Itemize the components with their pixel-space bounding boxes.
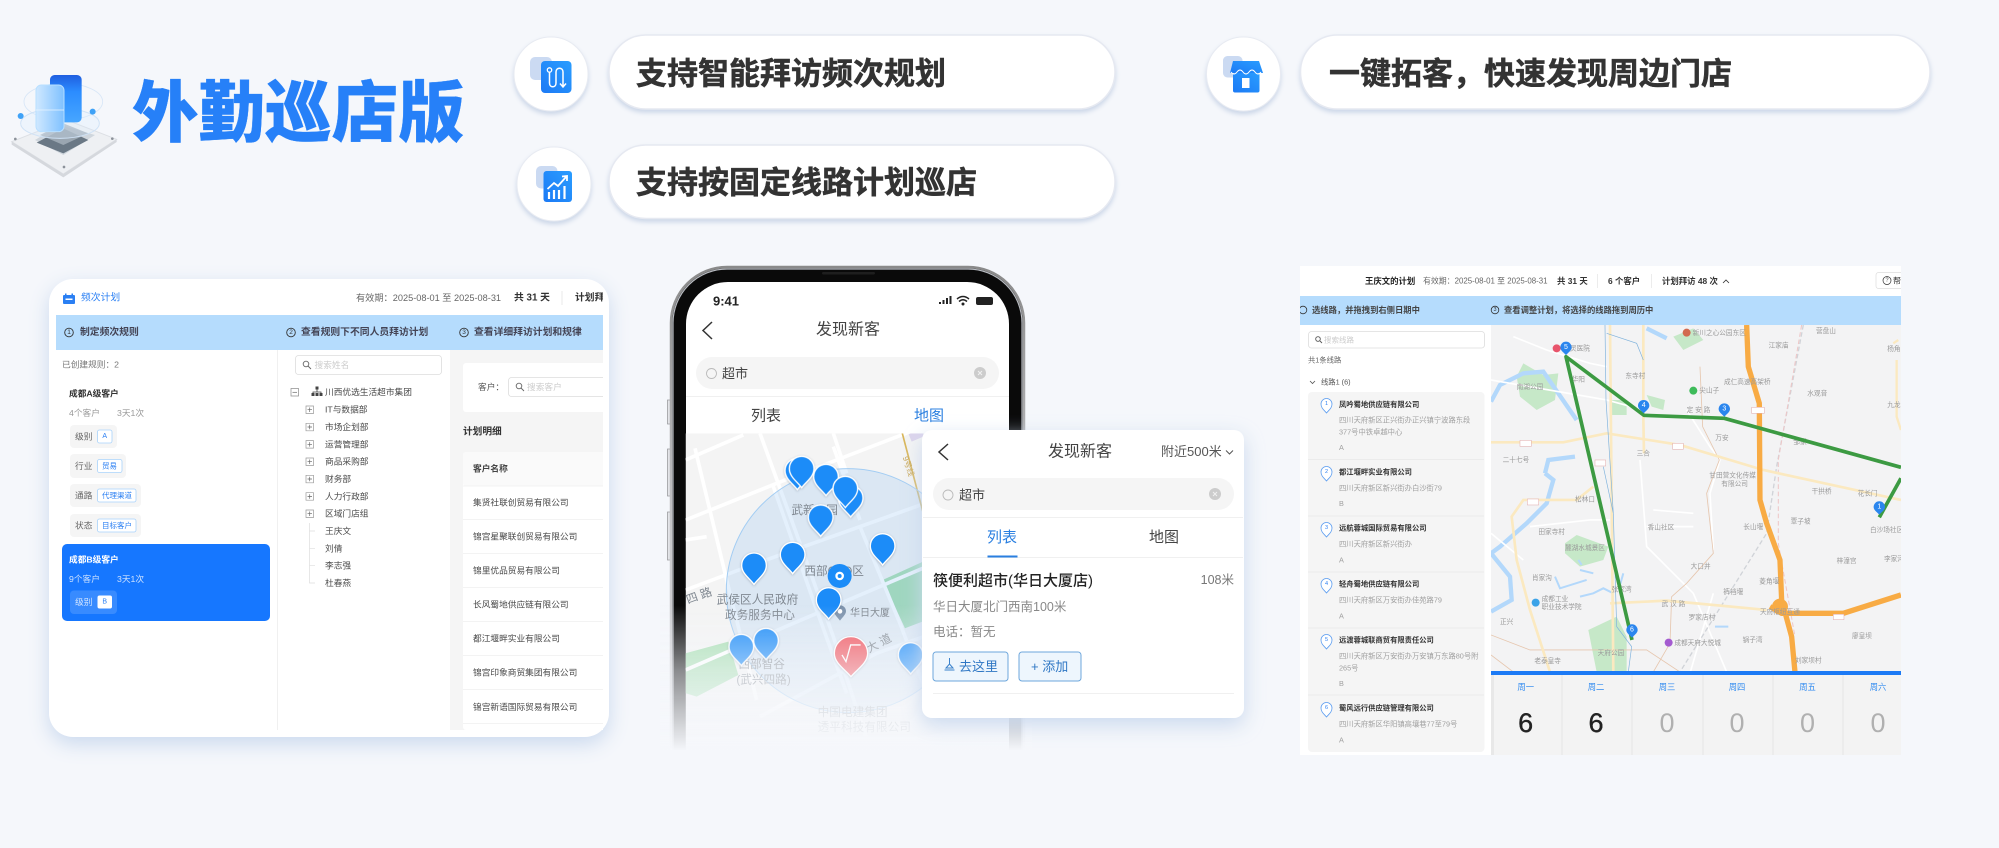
rule card A: 成都A级客户 — [69, 388, 119, 398]
organisation tree: 李志强 — [325, 560, 351, 571]
map labels: 南湖公园 — [1517, 382, 1544, 391]
map labels: 天府公园 — [1598, 648, 1625, 657]
card search bar: 超市 — [959, 488, 985, 502]
route stop 6: A — [1339, 736, 1344, 744]
road shields — [1520, 407, 1844, 620]
search names — [296, 356, 442, 374]
route stop 5: 远渡蓉城联商贸有限责任公司 — [1339, 636, 1434, 644]
rule card A — [69, 388, 144, 537]
plan header: 有效期：2025-08-01 至 2025-08-31 — [1423, 276, 1548, 286]
map labels: 三合 — [1637, 448, 1650, 457]
weekday labels: 周六 — [1870, 682, 1886, 692]
route stop 3: A — [1339, 556, 1344, 564]
map green areas — [686, 560, 927, 697]
numbered route pins: 6 — [1630, 626, 1634, 633]
button: add — [1019, 652, 1081, 681]
route list column: 搜索线路 — [1324, 334, 1354, 344]
map labels: 甘田营文化传媒 — [1709, 470, 1756, 479]
customer table: 锦里优品贸易有限公司 — [473, 564, 560, 576]
plan header — [1365, 272, 1909, 288]
step band: 3 — [1493, 307, 1497, 313]
route stop 4 — [1321, 578, 1442, 620]
daily visit counts: 0 — [1800, 708, 1815, 738]
map labels: 松林口 — [1575, 494, 1595, 503]
planned visits truncated: 计划拜访 — [575, 290, 614, 304]
route stop 1: 凤吟蜀地供应链有限公司 — [1339, 400, 1419, 409]
numbered route pins: 5 — [1564, 344, 1568, 351]
rule card A: 级别 — [75, 430, 92, 442]
customer table: 长风蜀地供应链有限公司 — [473, 598, 569, 610]
map labels — [684, 455, 917, 734]
customer table: 锦宫星聚联创贸易有限公司 — [473, 530, 577, 542]
heading: frequency plan: 频次计划 — [81, 290, 120, 304]
store address: 华日大厦北门西南100米 — [933, 599, 1067, 614]
map labels: 覃子坡 — [1791, 516, 1811, 525]
rule card A: 4个客户 — [69, 407, 100, 418]
screen title: 发现新客 — [816, 320, 880, 338]
feature: smart visit frequency planning — [514, 35, 1115, 111]
pill: text 1: 支持智能拜访频次规划 — [636, 56, 946, 92]
rule card B selected: 级别 — [75, 596, 92, 607]
button: go here: 去这里 — [959, 659, 998, 674]
map labels: 成都工业 — [1542, 594, 1569, 603]
status bar — [713, 294, 993, 308]
route stop 3: 远航蓉城国际贸易有限公司 — [1339, 524, 1427, 532]
map labels: 白沙场社区 — [1870, 525, 1904, 534]
organisation tree: 川西优选生活超市集团 — [325, 386, 412, 397]
organisation tree: 区域门店组 — [325, 508, 369, 519]
icon: route in circle — [514, 37, 588, 111]
phone bottom fade — [660, 605, 1032, 751]
route stop 6 — [1321, 703, 1457, 744]
rule card B selected: 成都B级客户 — [69, 554, 119, 564]
map labels: 9号线 — [901, 455, 917, 477]
step band — [1299, 296, 1901, 325]
map labels: 菱角堰 — [1759, 576, 1780, 585]
store phone: 电话：暂无 — [933, 625, 996, 639]
phone body — [671, 267, 1024, 827]
rule card A: A — [102, 433, 107, 440]
organisation tree: 市场企划部 — [325, 421, 369, 432]
step band: 查看调整计划，将选择的线路拖到周历中 — [1504, 305, 1653, 315]
map labels — [1500, 326, 1904, 665]
route list column: 线路1 (6) — [1321, 378, 1351, 386]
rivers — [1491, 328, 1667, 612]
route stop 6: 四川天府新区华阳镇高壤巷77至79号 — [1339, 720, 1457, 728]
button: go here — [933, 652, 1008, 681]
route list column — [1308, 332, 1484, 752]
back chevron — [703, 322, 712, 339]
customer filter card — [463, 363, 608, 412]
map labels: 成都天府大悦城 — [1674, 638, 1721, 647]
map labels: 麓湖水城景区 — [1565, 543, 1605, 552]
orange expressway — [1747, 325, 1901, 672]
map labels: 四 路 — [684, 584, 714, 607]
weekday labels: 周四 — [1729, 682, 1745, 692]
map labels: 长山堰 — [1743, 522, 1764, 531]
phone mockup — [667, 266, 1026, 746]
map labels: 西部智谷 — [738, 657, 785, 671]
icon: calendar — [63, 294, 75, 304]
map labels: 职业技术学院 — [1542, 602, 1582, 611]
map labels: 大 道 — [864, 631, 894, 656]
map labels: 干拱桥 — [1812, 486, 1832, 495]
rule card B selected: B — [102, 598, 107, 606]
weekday labels: 周五 — [1799, 682, 1816, 692]
map — [686, 433, 924, 738]
map labels: 香山社区 — [1648, 522, 1675, 531]
numbered route pins: 3 — [1722, 405, 1726, 412]
map labels: 灵医院 — [1570, 343, 1590, 352]
map labels: 有限公司 — [1721, 479, 1748, 488]
plan header: 王庆文的计划 — [1365, 276, 1415, 286]
organisation tree: IT与数据部 — [325, 404, 368, 415]
map labels: 定 安 路 — [1687, 405, 1711, 414]
map labels: 廖皇坝 — [1852, 631, 1872, 640]
map labels: 政务服务中心 — [725, 608, 795, 622]
route stop 3 — [1321, 522, 1427, 564]
customer table: 客户名称 — [473, 462, 508, 474]
validity period: 有效期：2025-08-01 至 2025-08-31 — [356, 292, 501, 303]
rule card A: 3天1次 — [117, 407, 144, 418]
poi markers — [1532, 329, 1697, 647]
pill: text 2 — [609, 145, 1115, 218]
customer filter card: 客户： — [478, 381, 504, 392]
step band: 选线路，并拖拽到右侧日期中 — [1312, 305, 1420, 315]
rule card B selected: 9个客户 — [69, 573, 100, 584]
organisation tree: 人力行政部 — [325, 490, 369, 501]
map labels: 水观音 — [1807, 388, 1828, 397]
organisation tree: 刘倩 — [325, 542, 343, 553]
customer table: 锦宫新语国际贸易有限公司 — [473, 701, 577, 712]
weekday labels — [1517, 682, 1886, 692]
map labels: 罗家店村 — [1689, 612, 1716, 621]
route stop 3: 四川天府新区新兴街办 — [1339, 540, 1412, 548]
map labels: 张家湾 — [1612, 584, 1632, 593]
tabs — [751, 408, 944, 424]
icon: chart in circle — [517, 147, 591, 221]
step band: 1 — [67, 329, 71, 336]
card tabs: 列表 — [987, 529, 1017, 546]
search bar: 超市 — [722, 366, 748, 381]
card tabs: 地图 — [1149, 529, 1179, 546]
daily visit counts — [1518, 708, 1886, 738]
rule card A: 代理渠道 — [102, 490, 132, 500]
plan header: 计划拜访 48 次 — [1662, 276, 1718, 286]
parks — [1517, 328, 1703, 672]
customer table: 集贤社联创贸易有限公司 — [473, 496, 569, 508]
side buttons — [668, 400, 672, 560]
map labels: 刘家坝村 — [1795, 655, 1822, 664]
pill: text 1 — [609, 35, 1115, 109]
plan details heading: 计划明细 — [463, 424, 502, 438]
route stop 4: A — [1339, 612, 1344, 620]
weekday labels: 周三 — [1659, 682, 1675, 692]
route stop 1: A — [1339, 443, 1344, 452]
feature: fixed route plan patrol — [517, 145, 1115, 221]
rule card B selected: 3天1次 — [117, 573, 144, 584]
route list column: 共1条线路 — [1308, 356, 1342, 364]
store distance: 108米 — [1201, 573, 1234, 587]
map labels: 东寺村 — [1625, 371, 1646, 380]
map labels: 华日大厦 — [850, 606, 890, 619]
title: 外勤巡店版 — [132, 77, 464, 151]
rule card A: 贸易 — [102, 460, 117, 470]
route stop 5 — [1321, 634, 1479, 688]
total days: 共 31 天 — [514, 290, 550, 304]
organisation tree — [291, 386, 412, 588]
store name: 筷便利超市(华日大厦店) — [933, 572, 1093, 590]
yellow arterial roads — [1491, 325, 1901, 672]
grey roads — [1491, 337, 1727, 673]
green route line — [1566, 357, 1901, 640]
map labels: 梓潼宫 — [1837, 556, 1857, 565]
panel header — [63, 292, 603, 304]
route stop 4: 轻舟蜀地供应链有限公司 — [1339, 580, 1419, 588]
daily visit counts: 6 — [1588, 708, 1604, 738]
customer table: 都江堰畔实业有限公司 — [473, 632, 560, 644]
detail column — [450, 350, 608, 730]
map labels: 透平科技有限公司 — [818, 720, 911, 734]
map labels: 九龙 — [1887, 400, 1901, 409]
route stop 4: 四川天府新区万安街办佳苑路79 — [1339, 596, 1442, 604]
current location dot — [828, 564, 852, 588]
card title: 发现新客 — [1048, 442, 1112, 460]
numbered route pins: 1 — [1877, 503, 1881, 510]
customer table: 锦宫印象商贸集团有限公司 — [473, 666, 577, 678]
rule count: 已创建规则：2 — [62, 358, 119, 370]
search bar — [696, 357, 999, 389]
phone screen — [686, 282, 1009, 746]
panel: frequency plan screenshot — [49, 279, 614, 737]
customer filter card: 搜索客户 — [527, 381, 562, 392]
map labels: 中国电建集团 — [818, 705, 888, 719]
route stop 1 — [1321, 398, 1470, 452]
step band: 查看详细拜访计划和规律 — [474, 325, 582, 338]
map labels: 邹家 — [1793, 437, 1807, 446]
route stop 4: 4 — [1325, 581, 1328, 587]
card tabs — [923, 529, 1243, 558]
map labels: 天府枢纽互通 — [1760, 607, 1800, 616]
panel: route planning screenshot — [1299, 266, 1909, 755]
plan header: 6 个客户 — [1608, 276, 1640, 286]
route stop 2: 2 — [1325, 469, 1328, 475]
organisation tree: 财务部 — [325, 473, 351, 484]
customer table — [463, 452, 608, 730]
help button — [1876, 272, 1901, 289]
map labels: 万安 — [1715, 433, 1729, 442]
map labels: 杨角 — [1887, 344, 1901, 353]
map roads — [686, 434, 922, 672]
route stop 6: 6 — [1325, 705, 1328, 711]
step band: 2 — [289, 329, 293, 336]
search names: 搜索姓名 — [314, 359, 349, 370]
map labels: 老泰皇寺 — [1534, 656, 1561, 665]
route stop 2: 四川天府新区新兴街办白沙街79 — [1339, 484, 1442, 492]
feature: one-click customer discovery — [1206, 35, 1930, 111]
building marker — [834, 605, 846, 621]
map pins — [729, 456, 923, 674]
route stop 5: 5 — [1325, 637, 1328, 643]
map labels: 江家庙 — [1769, 340, 1789, 349]
rule card A: 通路 — [75, 490, 93, 500]
route map — [1491, 325, 1904, 673]
map labels: 锅子湾 — [1743, 635, 1763, 644]
route stop 5: B — [1339, 679, 1344, 688]
map labels: 新川之心公园东区 — [1693, 328, 1746, 337]
rule card A: 目标客户 — [102, 520, 132, 530]
map labels: 西部CBD区 — [804, 564, 864, 578]
step band: 制定频次规则 — [80, 325, 139, 338]
pill: text 2: 支持按固定线路计划巡店 — [636, 166, 977, 200]
map labels: 肖家沟 — [1532, 573, 1552, 582]
map labels: 武 汉 路 — [1662, 599, 1686, 608]
organisation tree: 王庆文 — [325, 525, 351, 536]
route stop 1: 1 — [1325, 401, 1328, 407]
route stop 1: 377号中铁卓越中心 — [1339, 428, 1403, 436]
route stop 5: 265号 — [1339, 664, 1358, 672]
route stop 5: 四川天府新区万安街办万安镇万东路80号附 — [1339, 652, 1479, 660]
pill: text 3 — [1300, 35, 1930, 109]
daily visit counts: 0 — [1729, 708, 1745, 738]
organisation tree: 商品采购部 — [325, 456, 369, 467]
route stop 1: 四川天府新区正兴街办正兴镇宁波路东段 — [1339, 416, 1470, 424]
button: add: + 添加 — [1031, 659, 1068, 674]
numbered route pins: 4 — [1642, 402, 1646, 409]
step band: 查看规则下不同人员拜访计划 — [301, 325, 429, 338]
organisation tree: 杜春燕 — [325, 577, 351, 588]
route stop 2 — [1321, 466, 1442, 508]
step band: 3 — [462, 329, 466, 336]
icon: isometric logo — [12, 75, 117, 177]
map labels: 李家河 — [1884, 554, 1904, 563]
map labels: 裤裆堰 — [1723, 587, 1744, 596]
icon: store in circle — [1206, 37, 1280, 111]
tabs: 列表 — [751, 408, 781, 424]
card back chevron — [939, 444, 948, 460]
map labels: 正兴 — [1500, 617, 1514, 626]
rule card A: 行业 — [75, 460, 93, 471]
daily visit counts: 0 — [1870, 708, 1886, 738]
map search radius — [726, 468, 922, 713]
daily visit counts: 6 — [1518, 708, 1533, 738]
floating list card — [922, 430, 1244, 718]
weekly calendar — [1491, 671, 1901, 755]
nearby 500 metres filter: 附近500米 — [1161, 444, 1222, 459]
route stop 3: 3 — [1325, 525, 1328, 531]
map labels: (武兴四路) — [736, 672, 791, 686]
help button: ? — [1885, 278, 1889, 284]
step band — [56, 315, 603, 350]
rule card A: 状态 — [75, 520, 93, 530]
numbered route pins — [1560, 342, 1885, 638]
rule card B selected — [62, 544, 270, 621]
map labels: 大口井 — [1691, 561, 1711, 570]
help button: 帮助 — [1893, 276, 1909, 286]
weekday labels: 周一 — [1517, 682, 1534, 692]
route stop 2: 都江堰畔实业有限公司 — [1339, 468, 1412, 476]
map labels: 田家寺村 — [1538, 527, 1565, 536]
organisation tree: 运营管理部 — [325, 438, 369, 449]
status bar: 9:41 — [713, 294, 739, 308]
card search bar — [933, 478, 1234, 510]
map labels: 营盘山 — [1816, 326, 1836, 335]
tabs: 地图 — [914, 408, 944, 424]
daily visit counts: 0 — [1659, 708, 1675, 738]
route stop 6: 蜀风远行供应链管理有限公司 — [1339, 704, 1434, 712]
pill: text 3: 一键拓客，快速发现周边门店 — [1329, 56, 1732, 92]
route stop 2: B — [1339, 499, 1344, 508]
red selected pin — [834, 637, 868, 677]
map labels: 武新公园 — [791, 503, 838, 517]
plan header: 共 31 天 — [1557, 276, 1588, 286]
map labels: 二十七号 — [1503, 455, 1530, 464]
map labels: 华阳 — [1572, 374, 1585, 383]
map labels: 成仁高速高架桥 — [1724, 377, 1771, 386]
map labels: 尖山子 — [1699, 385, 1720, 394]
weekday labels: 周二 — [1588, 682, 1604, 692]
map labels: 花长门 — [1858, 488, 1878, 497]
map labels: 武侯区人民政府 — [717, 592, 799, 606]
